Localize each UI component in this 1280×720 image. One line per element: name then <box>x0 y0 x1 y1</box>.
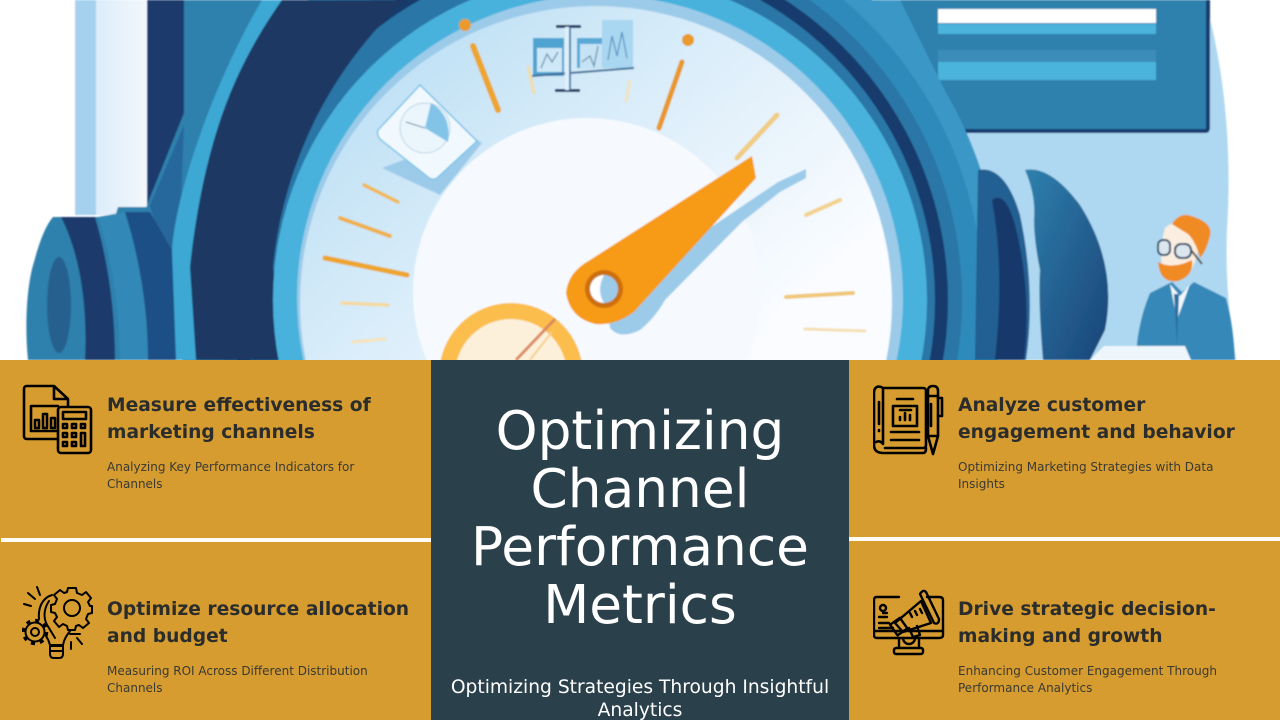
heading <box>107 395 371 443</box>
description: Insights <box>958 477 1005 491</box>
heading: Optimize resource allocation <box>107 599 409 620</box>
icon: charts on gauge face <box>528 20 634 102</box>
left housing <box>0 0 405 360</box>
description: Optimizing Marketing Strategies with Data <box>958 460 1213 474</box>
subtitle: Optimizing Strategies Through Insightful <box>451 677 829 698</box>
panel: optimize resource allocation <box>0 540 431 720</box>
description <box>107 664 368 695</box>
gauge needle <box>566 156 806 335</box>
title: Optimizing <box>496 399 784 462</box>
heading: Analyze customer <box>958 395 1145 416</box>
icon: pie chart card <box>377 85 482 195</box>
panel: analyze customer engagement <box>849 360 1280 539</box>
heading <box>958 395 1235 443</box>
description: Channels <box>107 681 163 695</box>
heading: Drive strategic decision- <box>958 599 1216 620</box>
heading <box>107 599 409 647</box>
orange dial <box>439 303 583 447</box>
panel: drive strategic decisions <box>849 539 1280 720</box>
description: Measuring ROI Across Different Distribution <box>107 664 368 678</box>
heading: making and growth <box>958 626 1162 647</box>
backdrop: light blue shape <box>880 0 1236 360</box>
presenter figure <box>1090 215 1235 360</box>
side knob right <box>975 169 1108 360</box>
gauge ticks <box>325 19 865 342</box>
description <box>958 460 1213 491</box>
description <box>958 664 1217 695</box>
heading: marketing channels <box>107 422 315 443</box>
gauge face <box>273 0 927 627</box>
icon: monitor with megaphone <box>873 590 944 656</box>
description: Channels <box>107 477 163 491</box>
panel: measure effectiveness <box>0 360 431 540</box>
description: Enhancing Customer Engagement Through <box>958 664 1217 678</box>
icon: report and calculator <box>22 384 92 454</box>
description: Performance Analytics <box>958 681 1092 695</box>
heading: Measure effectiveness of <box>107 395 371 416</box>
title: Metrics <box>543 573 737 636</box>
divider right <box>849 537 1280 541</box>
title: Channel <box>531 457 749 520</box>
heading: and budget <box>107 626 228 647</box>
description: Analyzing Key Performance Indicators for <box>107 460 354 474</box>
illustration: performance gauge <box>25 0 1236 360</box>
outer gauge rings right <box>178 0 1002 712</box>
icon: notebook and pen <box>873 384 944 456</box>
title: Performance <box>471 515 809 578</box>
description <box>107 460 354 491</box>
divider left <box>1 538 431 542</box>
panel: dashboard screen <box>880 0 1210 133</box>
heading <box>958 599 1216 647</box>
title <box>471 399 809 636</box>
panel: title <box>431 360 849 720</box>
heading: engagement and behavior <box>958 422 1235 443</box>
icon: lightbulb with gears <box>22 586 93 659</box>
subtitle <box>451 677 829 720</box>
